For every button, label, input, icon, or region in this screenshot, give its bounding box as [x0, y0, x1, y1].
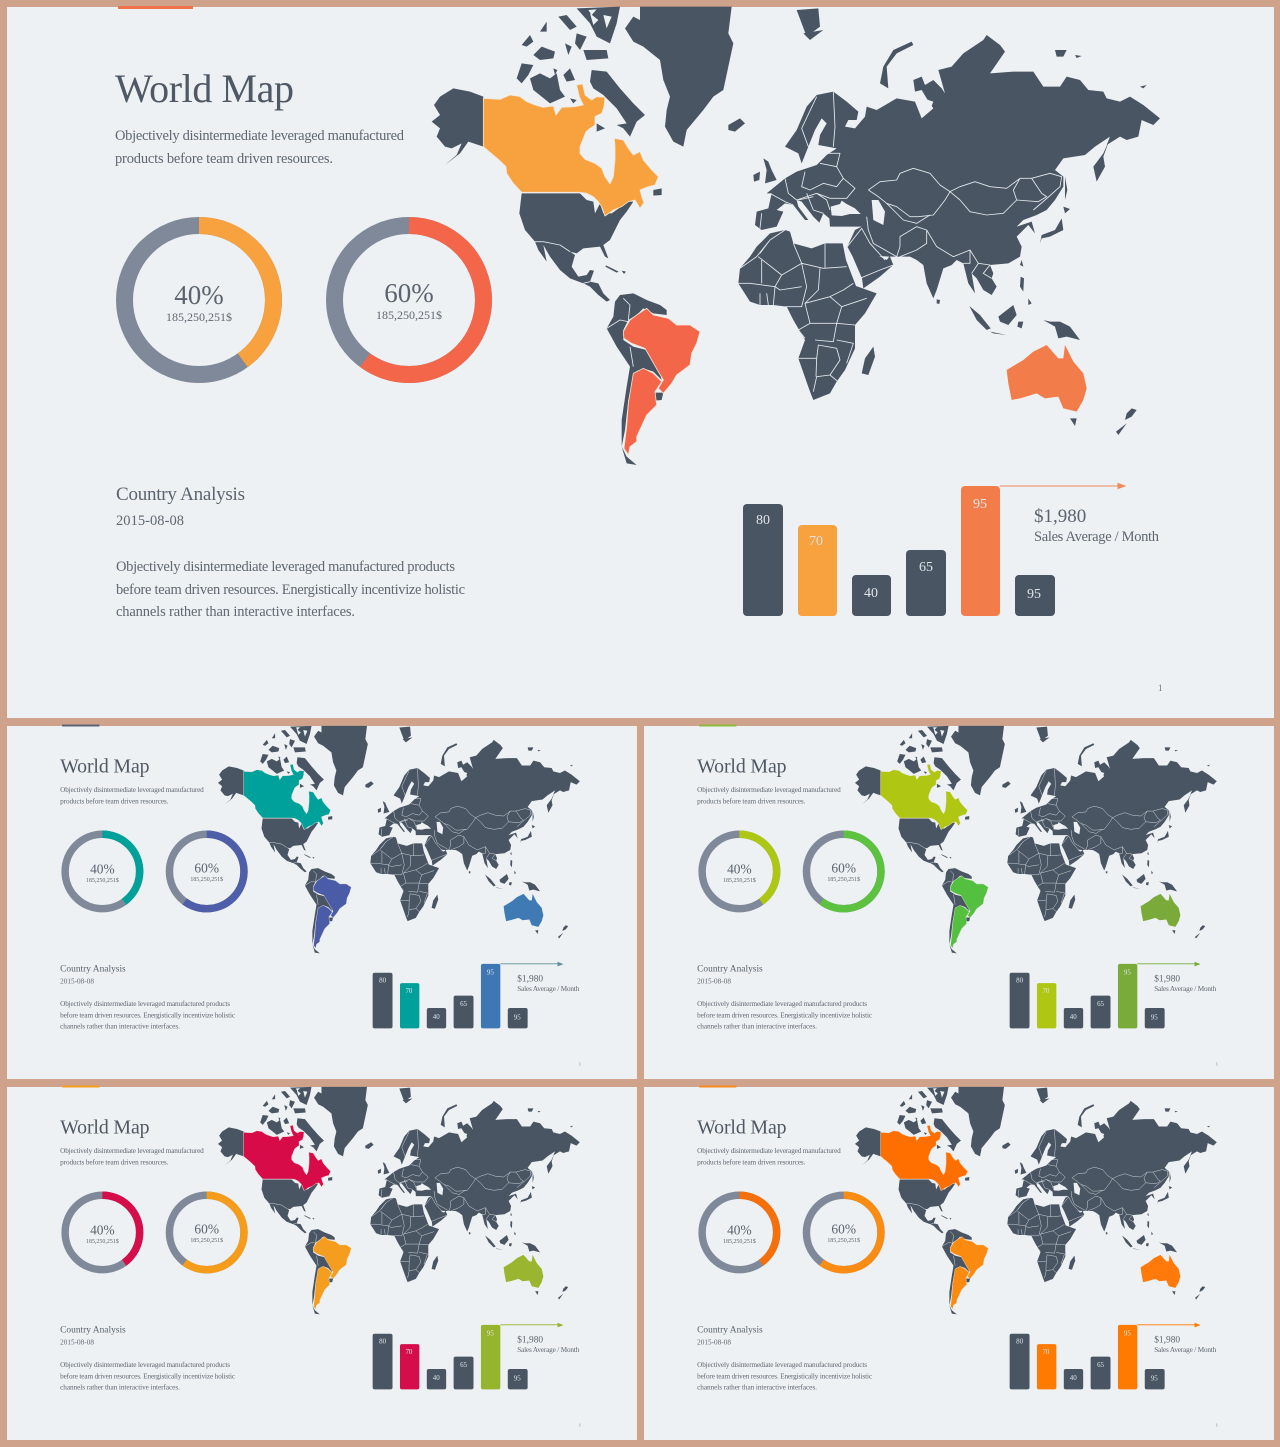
country: Canada: [244, 1125, 331, 1191]
donut: 60%: [169, 1195, 244, 1270]
arrow: [500, 1323, 562, 1327]
country analysis text: before team driven resources. Energistically incentivize holistic: [60, 1372, 235, 1380]
intro text: Objectively disintermediate leveraged manufactured: [115, 128, 405, 144]
bar chart: 95: [1027, 587, 1041, 602]
country analysis text: 2015-08-08: [116, 513, 184, 529]
donut: 60%: 185,250,251$: [376, 308, 442, 322]
intro text: [697, 1147, 841, 1166]
world map: [855, 1087, 1217, 1314]
intro text: products before team driven resources.: [60, 1158, 169, 1166]
countries: Brazil and Argentina: [623, 308, 700, 455]
intro text: Objectively disintermediate leveraged manufactured: [60, 1147, 204, 1155]
title: World Map: [60, 756, 150, 778]
countries: Brazil and Argentina: [950, 1237, 988, 1309]
donut: 60%: 60%: [194, 1221, 219, 1236]
sales callout: Sales Average / Month: [1154, 1346, 1217, 1354]
donut: 40%: 40%: [90, 1222, 115, 1237]
bar chart: [373, 1325, 528, 1389]
donut: 40%: 185,250,251$: [86, 1238, 119, 1245]
donut: 60%: [806, 1195, 881, 1270]
slide 2: teal and blue: [7, 725, 637, 1079]
page number: 1: [1216, 1062, 1218, 1067]
bar chart: 40: [1070, 1013, 1077, 1021]
country analysis text: channels rather than interactive interfaces.: [697, 1383, 817, 1391]
donut: 60%: 60%: [831, 1221, 856, 1236]
donut: 60%: [806, 834, 881, 909]
bar chart: 40: [1070, 1374, 1077, 1382]
bar chart: 65: [919, 560, 933, 575]
sales callout: [1034, 506, 1160, 545]
country: Australia: [504, 894, 543, 927]
bar chart: 80: [756, 513, 770, 528]
top tab: [699, 725, 736, 726]
sales callout: [517, 1335, 580, 1354]
intro text: Objectively disintermediate leveraged manufactured: [60, 786, 204, 794]
intro text: products before team driven resources.: [60, 797, 169, 805]
country analysis text: Country Analysis: [697, 964, 763, 974]
bar chart: 95: [973, 497, 987, 512]
intro text: [697, 786, 841, 805]
sales callout: $1,980: [517, 974, 543, 985]
donut: 60%: 185,250,251$: [827, 1237, 860, 1244]
donut: 40%: 185,250,251$: [166, 310, 232, 324]
slide 5: orange: [644, 1086, 1274, 1440]
arrow: [1137, 962, 1199, 966]
sales callout: [517, 974, 580, 993]
countries: Brazil and Argentina: [950, 876, 988, 948]
bar chart: 95: [514, 1374, 521, 1382]
bar chart: 95: [1124, 969, 1131, 977]
arrow: [1137, 1323, 1199, 1327]
donut: 40%: [702, 1195, 777, 1270]
donut: 60%: 60%: [384, 278, 434, 308]
title: World Map: [697, 756, 787, 778]
country: Australia: [504, 1255, 543, 1288]
bar chart: 80: [1016, 1338, 1024, 1346]
sales callout: Sales Average / Month: [517, 985, 580, 993]
country analysis text: Objectively disintermediate leveraged manufactured products: [697, 1000, 867, 1008]
title: World Map: [115, 66, 294, 111]
donut: 40%: [65, 834, 140, 909]
bar chart: 65: [1097, 1000, 1105, 1008]
country analysis text: before team driven resources. Energistically incentivize holistic: [116, 582, 465, 598]
country analysis text: Objectively disintermediate leveraged manufactured products: [697, 1361, 867, 1369]
country analysis text: Objectively disintermediate leveraged manufactured products: [60, 1000, 230, 1008]
title: World Map: [60, 1117, 150, 1139]
donut: 60%: [169, 834, 244, 909]
country analysis text: before team driven resources. Energistically incentivize holistic: [697, 1011, 872, 1019]
country analysis text: Country Analysis: [116, 484, 245, 505]
country: Australia: [1141, 894, 1180, 927]
intro text: [60, 786, 204, 805]
donut: 60%: 185,250,251$: [827, 876, 860, 883]
country analysis text: channels rather than interactive interfaces.: [697, 1022, 817, 1030]
sales callout: $1,980: [517, 1335, 543, 1346]
country analysis text: [697, 964, 872, 1030]
bar chart: [373, 964, 528, 1028]
arrow: [1000, 484, 1125, 488]
country analysis text: [116, 484, 465, 620]
intro text: products before team driven resources.: [697, 797, 806, 805]
bar chart: 70: [1042, 1348, 1050, 1356]
donut: 60%: 60%: [831, 860, 856, 875]
top tab: [699, 1086, 736, 1087]
intro text: products before team driven resources.: [115, 151, 333, 167]
country analysis text: channels rather than interactive interfaces.: [60, 1022, 180, 1030]
bar chart: 70: [405, 987, 413, 995]
country: Australia: [1141, 1255, 1180, 1288]
top tab: [62, 725, 99, 726]
donut: 40%: 185,250,251$: [723, 877, 756, 884]
country: Canada: [483, 84, 658, 216]
slide 3: lime and green: [644, 725, 1274, 1079]
world map: [218, 1087, 580, 1314]
page number: 1: [1158, 683, 1162, 693]
country analysis text: channels rather than interactive interfaces.: [116, 604, 355, 620]
donut: 40%: [124, 226, 274, 374]
country analysis text: Country Analysis: [60, 964, 126, 974]
top tab: [118, 6, 193, 9]
country analysis text: [697, 1325, 872, 1391]
bar chart: 95: [1151, 1374, 1158, 1382]
bar chart: 70: [1042, 987, 1050, 995]
bar chart: 70: [405, 1348, 413, 1356]
country: Australia: [1007, 345, 1087, 412]
country analysis text: [60, 1325, 235, 1391]
arrow: [500, 962, 562, 966]
donut: 40%: 40%: [727, 861, 752, 876]
world map: [432, 7, 1160, 465]
country analysis text: Country Analysis: [697, 1325, 763, 1335]
bar chart: [1010, 964, 1165, 1028]
bar chart: 80: [1016, 977, 1024, 985]
top tab: [62, 1086, 99, 1087]
donut: 60%: [334, 226, 484, 374]
intro text: [60, 1147, 204, 1166]
country analysis text: 2015-08-08: [60, 1339, 94, 1347]
slide 4: crimson and amber: [7, 1086, 637, 1440]
donut: 40%: 40%: [174, 280, 224, 310]
donut: 60%: 185,250,251$: [190, 1237, 223, 1244]
donut: 40%: 40%: [727, 1222, 752, 1237]
bar chart: 65: [460, 1361, 468, 1369]
bar chart: 95: [487, 1330, 494, 1338]
title: World Map: [697, 1117, 787, 1139]
sales callout: Sales Average / Month: [517, 1346, 580, 1354]
country analysis text: Country Analysis: [60, 1325, 126, 1335]
bar chart: 65: [460, 1000, 468, 1008]
world map: [855, 726, 1217, 953]
bar chart: 80: [379, 1338, 387, 1346]
country analysis text: 2015-08-08: [60, 978, 94, 986]
sales callout: $1,980: [1154, 1335, 1180, 1346]
bar chart: 95: [1151, 1013, 1158, 1021]
sales callout: [1154, 974, 1217, 993]
donut: 40%: 40%: [90, 861, 115, 876]
world map: [218, 726, 580, 953]
intro text: Objectively disintermediate leveraged manufactured: [697, 1147, 841, 1155]
slide 1: main: [7, 6, 1274, 718]
bar chart: 40: [433, 1013, 440, 1021]
donut: 40%: 185,250,251$: [723, 1238, 756, 1245]
bar chart: 80: [379, 977, 387, 985]
sales callout: [1154, 1335, 1217, 1354]
country analysis text: Objectively disintermediate leveraged manufactured products: [116, 559, 455, 575]
intro text: [115, 128, 405, 167]
sales callout: Sales Average / Month: [1154, 985, 1217, 993]
bar chart: 65: [1097, 1361, 1105, 1369]
bar chart: 95: [487, 969, 494, 977]
sales callout: $1,980: [1154, 974, 1180, 985]
country analysis text: 2015-08-08: [697, 978, 731, 986]
countries: Brazil and Argentina: [313, 876, 351, 948]
sales callout: $1,980: [1034, 506, 1086, 527]
donut: 40%: 185,250,251$: [86, 877, 119, 884]
bar chart: 95: [514, 1013, 521, 1021]
countries: Brazil and Argentina: [313, 1237, 351, 1309]
bar chart: 95: [1124, 1330, 1131, 1338]
donut: 40%: [65, 1195, 140, 1270]
page number: 1: [1216, 1423, 1218, 1428]
bar chart: 70: [809, 534, 823, 549]
bar chart: [743, 486, 1055, 616]
donut: 60%: 185,250,251$: [190, 876, 223, 883]
bar chart: 40: [433, 1374, 440, 1382]
bar chart: [1010, 1325, 1165, 1389]
country analysis text: before team driven resources. Energistically incentivize holistic: [60, 1011, 235, 1019]
country: Canada: [881, 764, 968, 830]
bar chart: 40: [864, 586, 878, 601]
country analysis text: before team driven resources. Energistically incentivize holistic: [697, 1372, 872, 1380]
country: Canada: [881, 1125, 968, 1191]
intro text: products before team driven resources.: [697, 1158, 806, 1166]
donut: 40%: [702, 834, 777, 909]
page number: 1: [579, 1062, 581, 1067]
country analysis text: channels rather than interactive interfaces.: [60, 1383, 180, 1391]
country analysis text: Objectively disintermediate leveraged manufactured products: [60, 1361, 230, 1369]
country: Canada: [244, 764, 331, 830]
donut: 60%: 60%: [194, 860, 219, 875]
country analysis text: [60, 964, 235, 1030]
sales callout: Sales Average / Month: [1034, 529, 1160, 545]
intro text: Objectively disintermediate leveraged manufactured: [697, 786, 841, 794]
page number: 1: [579, 1423, 581, 1428]
country analysis text: 2015-08-08: [697, 1339, 731, 1347]
